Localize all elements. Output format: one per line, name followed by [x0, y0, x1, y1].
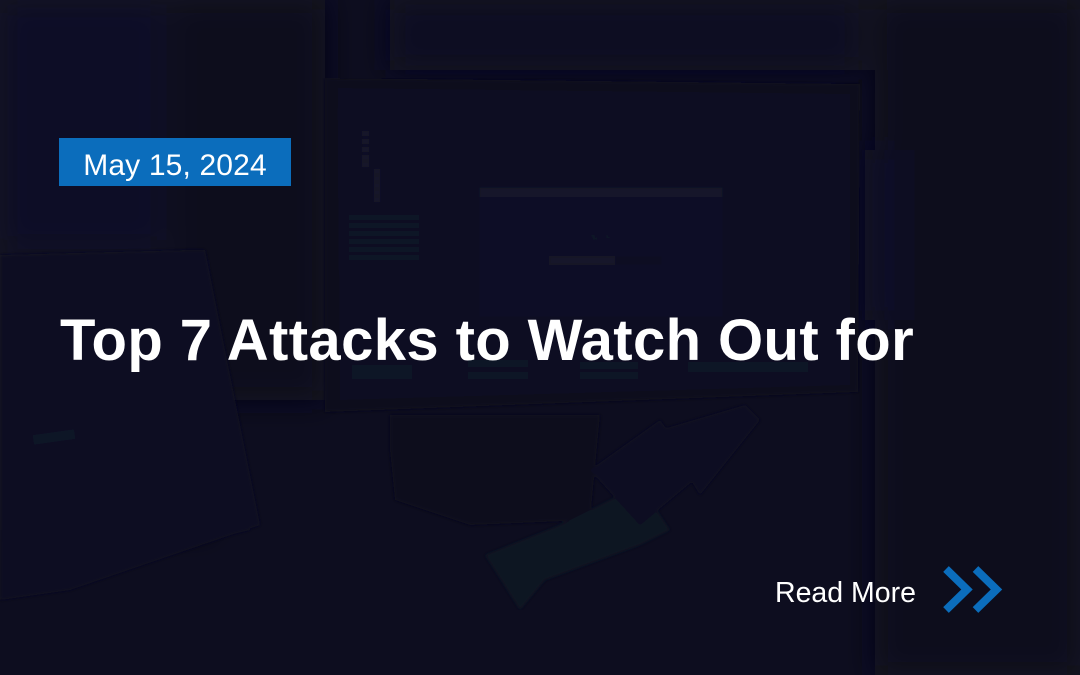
date badge [59, 138, 291, 186]
stand [390, 415, 600, 525]
background photo: dimmed desk with monitor and laptop: 52 % [591, 232, 611, 242]
papers and hands on desk [485, 485, 670, 610]
read more label: Read More [775, 577, 916, 609]
laptop [0, 250, 250, 590]
title: Top 7 Attacks to Watch Out for [60, 308, 914, 373]
date badge: May 15, 2024 [83, 149, 267, 182]
monitor [325, 78, 860, 412]
icon: double chevron arrow [943, 566, 1002, 613]
